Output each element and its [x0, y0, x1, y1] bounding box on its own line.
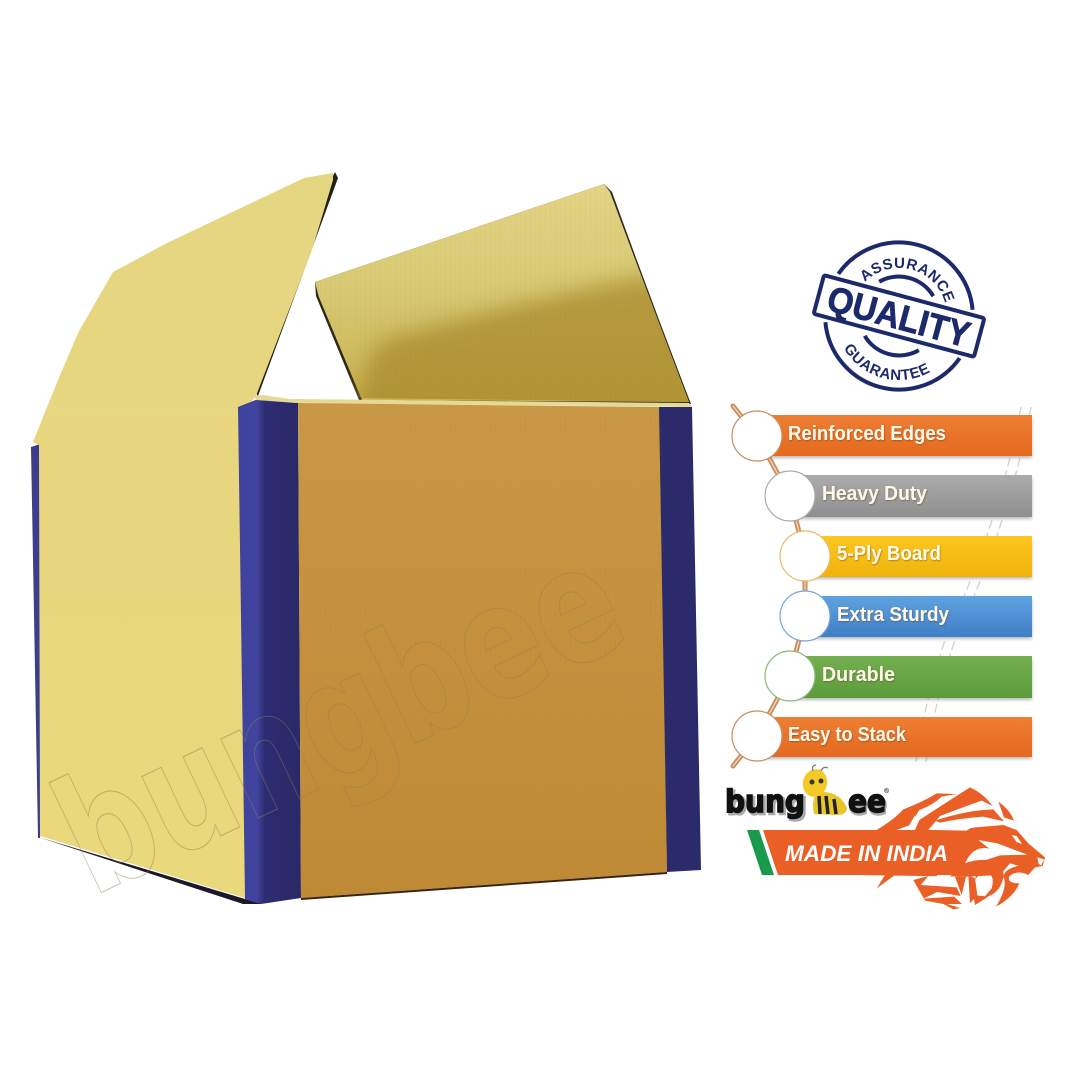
logo wordmark: ®: [883, 787, 890, 795]
feature: 5-Ply Board: [780, 531, 1032, 581]
feature: Extra Sturdy: [780, 591, 1032, 641]
feature: Durable: [765, 651, 1032, 701]
logo wordmark: ee: [849, 786, 887, 822]
feature: Easy to Stack: Easy to Stack: [788, 724, 907, 746]
feature: Durable: Durable: [822, 664, 895, 686]
feature: Reinforced Edges: Reinforced Edges: [788, 423, 946, 445]
dashed guide lines: [916, 407, 1031, 762]
banner bar: [763, 830, 870, 875]
logo wordmark: [725, 784, 890, 822]
bungbee watermark: bungbee: [28, 505, 650, 931]
logo wordmark: ee: [848, 784, 886, 820]
back flap: [315, 184, 700, 420]
made in india lion banner: [747, 787, 1045, 909]
left blue tape: [238, 399, 301, 904]
front panel: [298, 403, 667, 899]
feature: Reinforced Edges: [732, 411, 1032, 461]
quality assurance stamp: GUARANTEE: [845, 344, 930, 380]
feature: Heavy Duty: [765, 471, 1032, 521]
cardboard box: [28, 172, 701, 931]
lion artwork: [860, 787, 1045, 909]
left flap and side panel: [31, 172, 338, 904]
feature: Easy to Stack: [732, 711, 1032, 761]
rope connector: [733, 406, 805, 766]
icon: bee mascot: [800, 765, 847, 815]
feature: Heavy Duty: Heavy Duty: [822, 483, 928, 505]
right blue tape: [659, 407, 701, 872]
quality assurance stamp: [812, 240, 986, 392]
logo wordmark: bung: [725, 784, 805, 820]
quality assurance stamp: ASSURANCE: [862, 258, 955, 302]
made in india text: MADE IN INDIA: [785, 841, 948, 866]
logo wordmark: bung: [727, 786, 807, 822]
feature: 5-Ply Board: 5-Ply Board: [837, 543, 941, 565]
top fold edge: [254, 395, 692, 407]
lion facial cut-outs: [907, 815, 1044, 877]
feature: Extra Sturdy: Extra Sturdy: [837, 604, 950, 626]
green stripe: [747, 830, 774, 875]
quality assurance stamp: QUALITY: [823, 278, 975, 355]
bungbee logo: [725, 765, 890, 822]
